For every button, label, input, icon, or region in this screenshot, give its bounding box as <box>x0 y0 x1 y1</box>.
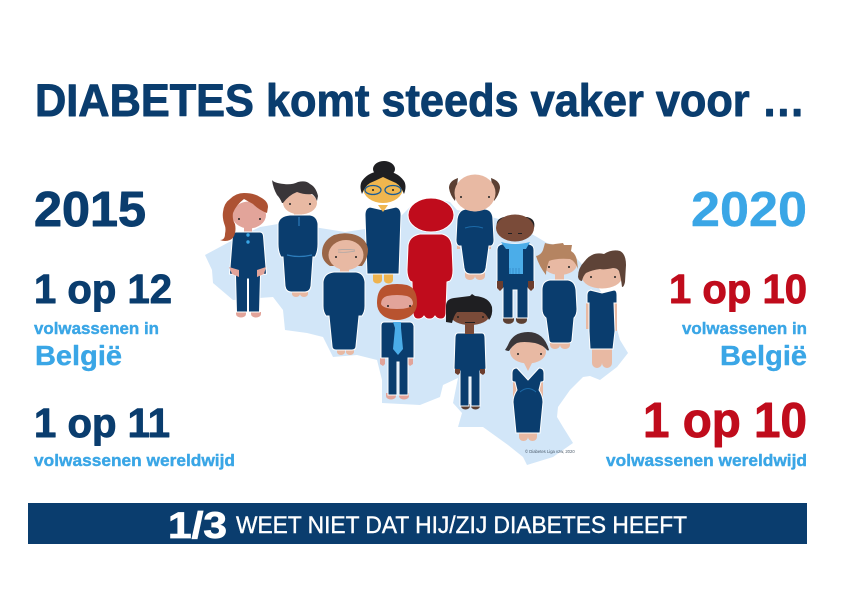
stat: 1 op 10 worldwide: 1 op 10 <box>643 394 807 448</box>
person: man with red beard and tie <box>377 284 417 400</box>
map of Belgium <box>205 198 628 465</box>
bottom banner <box>28 503 807 546</box>
banner figure: 1/3: 1/3 <box>168 505 227 546</box>
label: België: België <box>720 340 807 371</box>
stat: 1 op 11: 1 op 11 <box>34 400 170 446</box>
label: volwassenen wereldwijd: volwassenen wereldwijd <box>606 451 807 470</box>
person: woman with brown hair <box>578 250 626 368</box>
year 2015: 2015 <box>34 183 146 237</box>
stat: 1 op 12: 1 op 12 <box>34 266 172 312</box>
person: woman with bun and glasses <box>360 161 406 284</box>
person: bald man <box>449 174 500 280</box>
banner text: WEET NIET DAT HIJ/ZIJ DIABETES HEEFT <box>236 512 687 539</box>
person: man with dark skin and black hair <box>446 294 492 410</box>
title: DIABETES komt steeds vaker voor … <box>35 75 805 126</box>
label: volwassenen wereldwijd: volwassenen wereldwijd <box>34 451 235 470</box>
label: volwassenen in: volwassenen in <box>682 319 807 338</box>
person: man with black swept hair <box>272 180 318 297</box>
panel: 2020 statistics <box>606 183 807 470</box>
stat: 1 op 10 Belgium: 1 op 10 <box>669 266 807 312</box>
person: older man with brown hair <box>322 233 368 355</box>
person: man with blue scarf <box>496 214 534 324</box>
copyright note: © Diabetes Liga vzw, 2020 <box>525 449 575 454</box>
year 2020: 2020 <box>691 183 807 237</box>
panel: 2015 statistics <box>34 183 235 470</box>
label: België: België <box>35 340 122 371</box>
person: red silhouette with diabetes <box>407 198 454 319</box>
person: man with blond hair <box>536 243 578 349</box>
person: pregnant woman <box>505 332 549 441</box>
person: woman with red hair <box>220 193 268 318</box>
label: volwassenen in: volwassenen in <box>34 319 159 338</box>
